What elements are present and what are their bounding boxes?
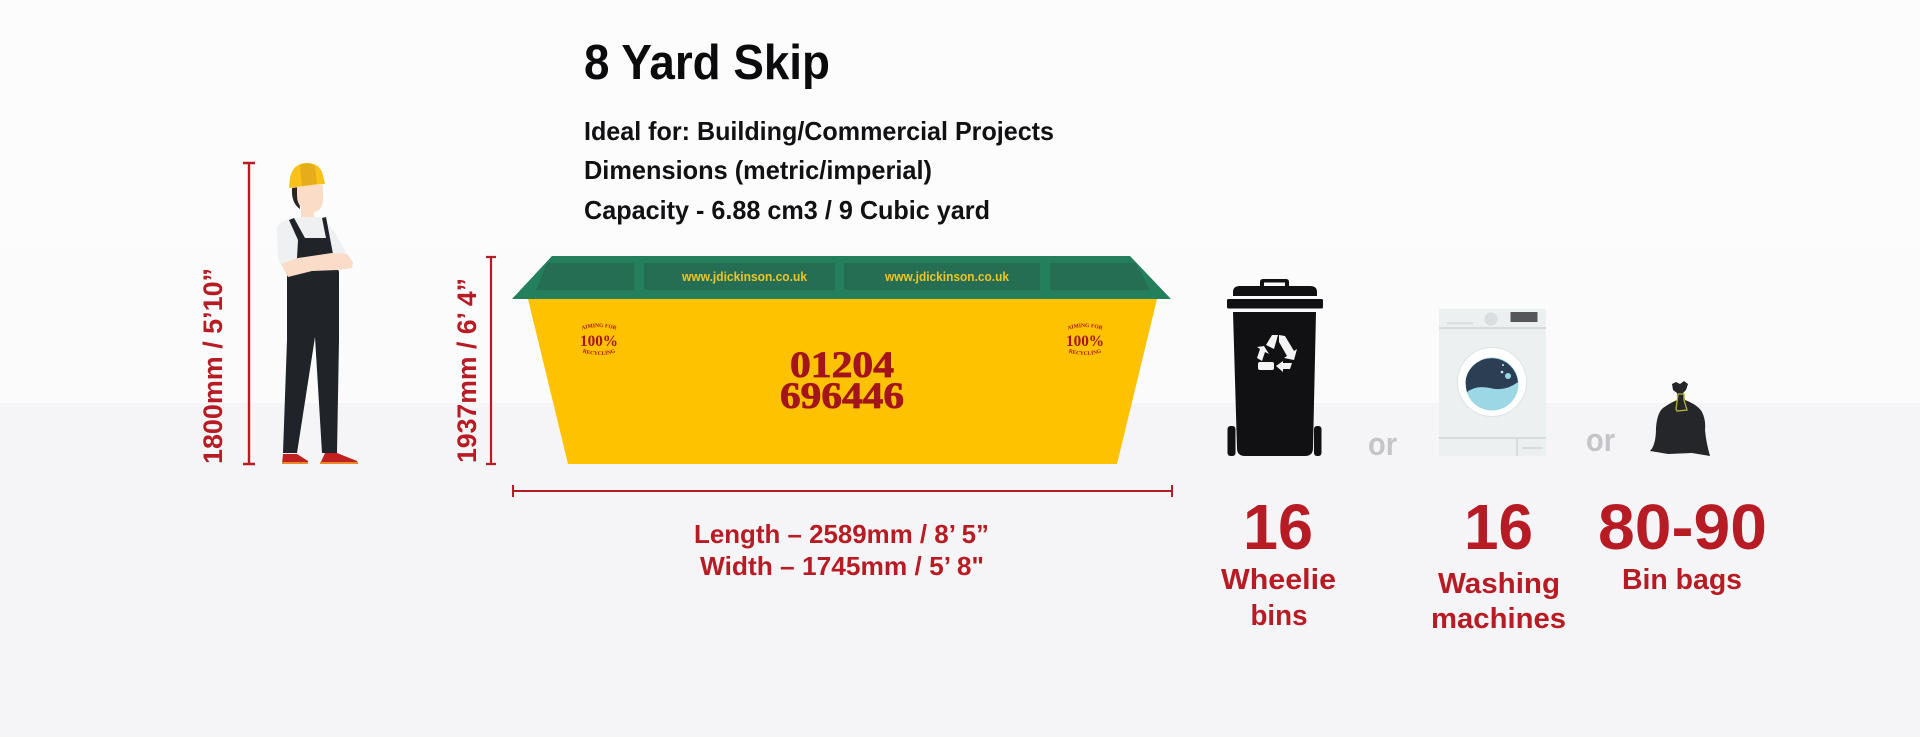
skip website text: www.jdickinson.co.uk bbox=[884, 269, 1010, 284]
height marker: person: 1800mm / 5’10” bbox=[198, 268, 228, 464]
skip phone number bbox=[780, 345, 904, 417]
stat: bin bags: Bin bags bbox=[1622, 564, 1742, 596]
skip website text bbox=[681, 269, 1010, 284]
height marker: person bbox=[198, 163, 255, 464]
stat: washing machines: Washing bbox=[1438, 568, 1560, 600]
stat: wheelie bins: bins bbox=[1250, 600, 1308, 632]
worker head and neck bbox=[297, 185, 323, 222]
worker folded arms bbox=[281, 253, 353, 277]
icon: wheelie bin bbox=[1227, 279, 1323, 456]
height marker: skip: 1937mm / 6’ 4” bbox=[452, 278, 482, 463]
text block: skip details bbox=[584, 116, 1054, 225]
stat: washing machines: 16 bbox=[1464, 491, 1533, 563]
stat: washing machines bbox=[1431, 491, 1566, 635]
skip phone number: 01204 bbox=[790, 345, 894, 386]
badge: left recycling: AIMING FOR bbox=[582, 323, 616, 330]
or separator 1: or bbox=[1368, 426, 1397, 462]
skip website text: www.jdickinson.co.uk bbox=[681, 269, 808, 284]
badge: right recycling bbox=[1066, 323, 1104, 355]
stat: wheelie bins: Wheelie bbox=[1221, 564, 1336, 596]
worker overalls bbox=[283, 217, 339, 453]
skip illustration bbox=[512, 256, 1171, 464]
skip phone number: 696446 bbox=[780, 376, 904, 417]
badge: right recycling: 100% bbox=[1066, 333, 1104, 350]
or separator 2: or bbox=[1586, 422, 1615, 458]
badge: left recycling: RECYCLING bbox=[582, 348, 615, 355]
worker hair bbox=[292, 187, 300, 209]
text block: skip details: Capacity - 6.88 cm3 / 9 Cubic yard bbox=[584, 195, 990, 225]
stat: bin bags: 80-90 bbox=[1598, 491, 1767, 563]
skip body bbox=[528, 299, 1157, 464]
badge: left recycling bbox=[580, 323, 618, 355]
icon: washing machine bbox=[1439, 309, 1546, 456]
text block: skip length and width: Length – 2589mm / 8’ 5” bbox=[694, 519, 989, 549]
stat: wheelie bins bbox=[1221, 491, 1336, 632]
skip green rim bbox=[512, 256, 1171, 299]
badge: right recycling: AIMING FOR bbox=[1068, 323, 1102, 330]
icon: recycle symbol bbox=[1257, 335, 1297, 372]
width marker: skip length bbox=[513, 485, 1172, 497]
stat: bin bags bbox=[1598, 491, 1767, 596]
height marker: skip bbox=[452, 257, 496, 464]
icon: bin bag bbox=[1650, 381, 1710, 456]
stat: washing machines: machines bbox=[1431, 603, 1566, 635]
worker shoes bbox=[282, 453, 358, 464]
text block: skip details: Dimensions (metric/imperial) bbox=[584, 155, 932, 185]
text block: skip details: Ideal for: Building/Commercial Projects bbox=[584, 116, 1054, 146]
icon: construction worker bbox=[277, 163, 358, 464]
worker hard hat bbox=[289, 163, 325, 188]
badge: left recycling: 100% bbox=[580, 333, 618, 350]
badge: right recycling: RECYCLING bbox=[1068, 348, 1101, 355]
stat: wheelie bins: 16 bbox=[1243, 491, 1313, 563]
title: 8 Yard Skip bbox=[584, 36, 830, 90]
worker shirt bbox=[277, 217, 348, 265]
text block: skip length and width bbox=[694, 519, 989, 581]
text block: skip length and width: Width – 1745mm / 5’ 8" bbox=[700, 551, 984, 581]
